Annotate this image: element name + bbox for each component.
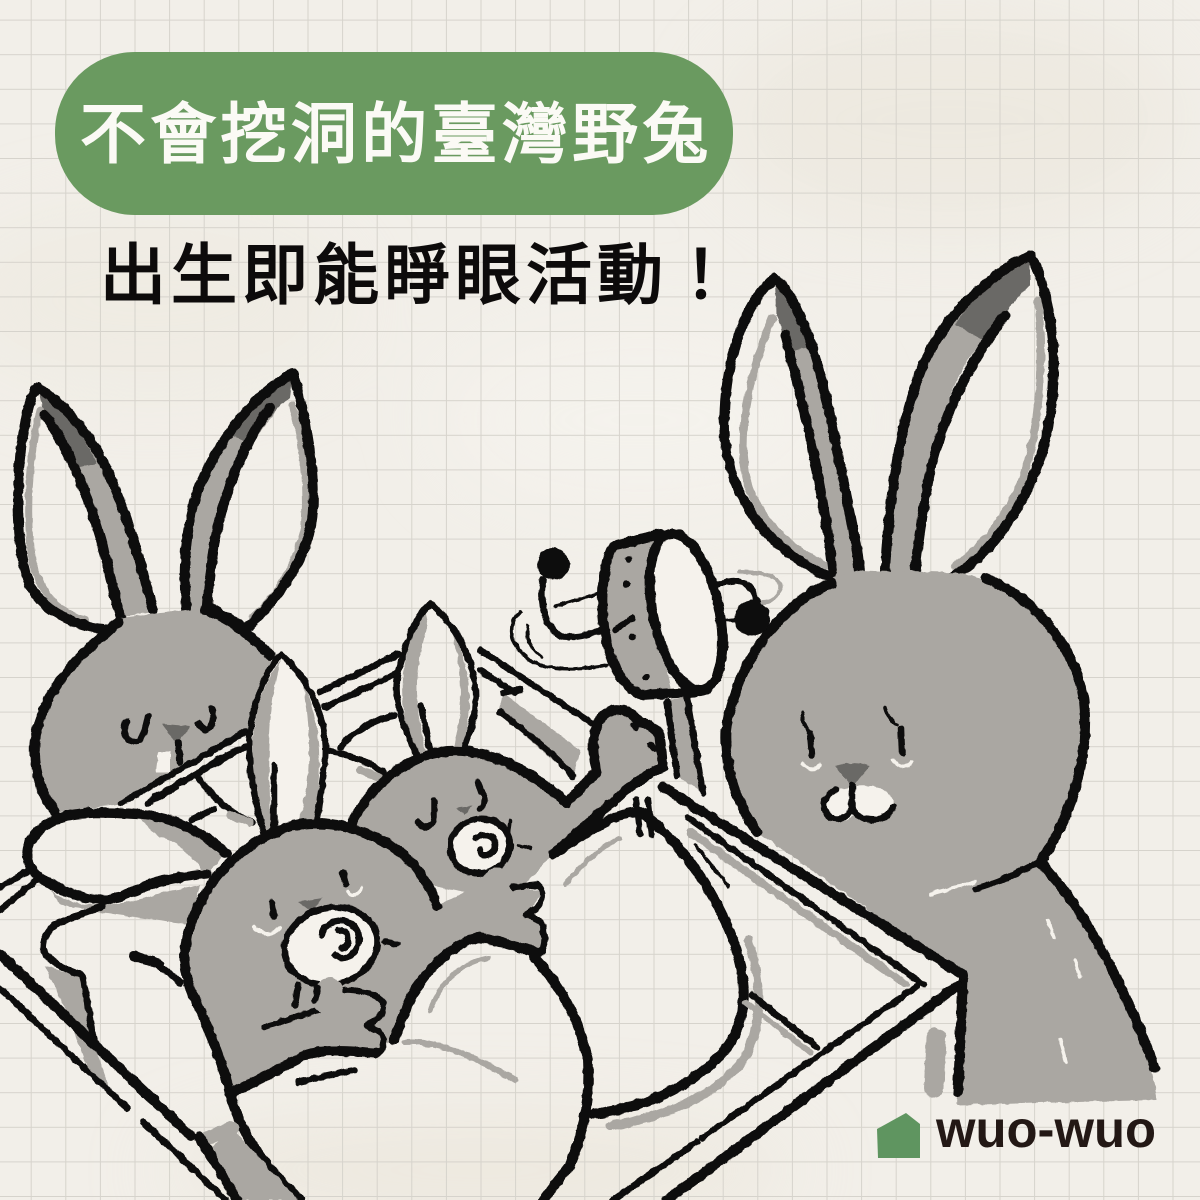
- ear: [249, 654, 325, 835]
- crib: front rails: [0, 787, 963, 1200]
- rattle drum: [512, 527, 781, 793]
- spin lines: [512, 612, 607, 669]
- subtitle: 出生即能睜眼活動！: [100, 238, 739, 312]
- title pill: [55, 52, 733, 215]
- face: [418, 782, 530, 880]
- head and body: [726, 570, 1157, 1105]
- face: [124, 708, 213, 772]
- crib: back rails: [0, 650, 593, 910]
- left ear: [18, 387, 153, 630]
- rabbit: right adult: [724, 255, 1157, 1105]
- head and raised arm: [352, 710, 663, 900]
- left ear: [724, 278, 860, 585]
- ear: [396, 604, 476, 760]
- baby rabbit: front: [27, 654, 588, 1200]
- rabbit: left adult: [18, 373, 313, 812]
- lower hand: [264, 990, 383, 1053]
- head and arm: [184, 824, 544, 1094]
- title text: 不會挖洞的臺灣野兔: [80, 97, 713, 171]
- back arm: [498, 693, 580, 778]
- string and balls: [537, 548, 770, 637]
- right ear: [885, 255, 1053, 585]
- belly: [134, 956, 588, 1200]
- right ear: [185, 373, 313, 630]
- head: [35, 608, 285, 812]
- face: [802, 708, 912, 821]
- drum body: [602, 532, 672, 693]
- belly: [553, 800, 759, 1126]
- baby rabbit: back: [352, 604, 759, 1126]
- icon: house: [877, 1113, 920, 1158]
- body detail: [930, 882, 1080, 1062]
- logo: [877, 1101, 1156, 1159]
- lying second ear: [27, 813, 226, 925]
- back and arm: [43, 906, 180, 1095]
- handle: [667, 697, 703, 793]
- face: [254, 873, 397, 1005]
- wordmark: wuo-wuo: [935, 1101, 1156, 1159]
